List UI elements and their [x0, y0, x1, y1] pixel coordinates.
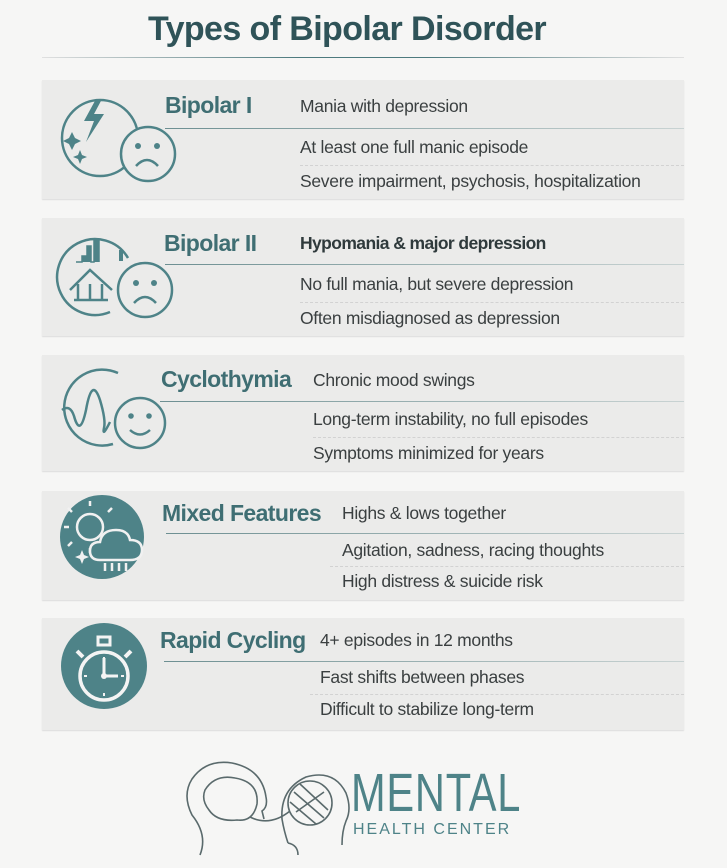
text: Severe impairment, psychosis, hospitalization — [300, 171, 641, 191]
text: HEALTH CENTER — [353, 821, 511, 838]
text: High distress & suicide risk — [342, 571, 543, 591]
text: Bipolar II: Bipolar II — [164, 230, 256, 256]
icon: sun and rain cloud — [60, 495, 144, 579]
text: Highs & lows together — [342, 503, 506, 523]
text: Rapid Cycling: Rapid Cycling — [160, 627, 306, 653]
text: Agitation, sadness, racing thoughts — [342, 540, 604, 560]
text: Mixed Features: Mixed Features — [162, 500, 321, 526]
text: Mania with depression — [300, 96, 468, 116]
icon: buildings with sad face — [57, 239, 172, 317]
text: Symptoms minimized for years — [313, 443, 544, 463]
text: Bipolar I: Bipolar I — [165, 92, 252, 118]
icon: lightning with sad face — [62, 99, 175, 181]
text: No full mania, but severe depression — [300, 274, 573, 294]
title: Types of Bipolar Disorder — [148, 10, 546, 48]
icon: wave with smile — [62, 370, 165, 448]
panel: Rapid Cycling — [42, 618, 684, 730]
panel: Mixed Features — [42, 491, 684, 600]
panel: Bipolar I — [42, 80, 684, 199]
text: Long-term instability, no full episodes — [313, 409, 588, 429]
text: Difficult to stabilize long-term — [320, 699, 534, 719]
text: Fast shifts between phases — [320, 667, 524, 687]
logo: two heads — [187, 762, 349, 855]
text: Cyclothymia: Cyclothymia — [161, 366, 291, 392]
text: 4+ episodes in 12 months — [320, 630, 513, 650]
text: Chronic mood swings — [313, 370, 475, 390]
text: Often misdiagnosed as depression — [300, 308, 560, 328]
logo text: MENTAL — [351, 763, 521, 823]
panel: Cyclothymia — [42, 355, 684, 471]
panel: Bipolar II — [42, 218, 684, 336]
text: Hypomania & major depression — [300, 233, 546, 253]
text: At least one full manic episode — [300, 137, 528, 157]
icon: stopwatch — [61, 623, 147, 709]
